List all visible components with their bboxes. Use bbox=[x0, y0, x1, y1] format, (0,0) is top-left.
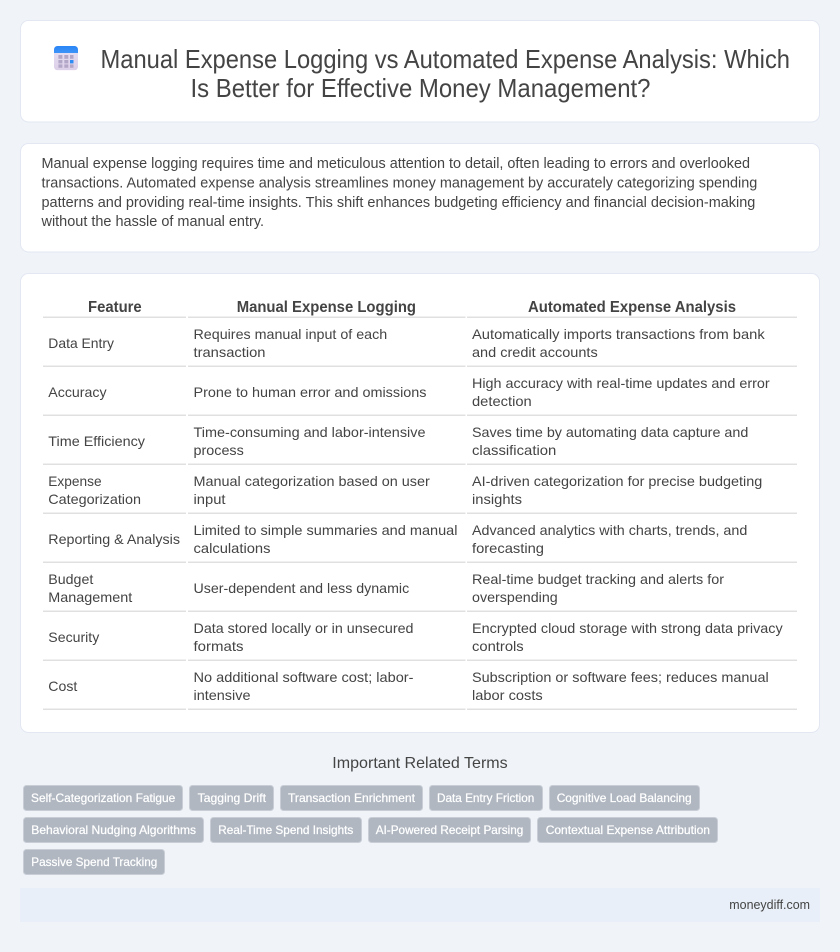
table row: time efficiency: process bbox=[194, 442, 244, 458]
tag: behavioral nudging algorithms: Behavioral Nudging Algorithms bbox=[31, 823, 196, 837]
icon: calendar bbox=[54, 46, 78, 70]
table row: expense categorization: input bbox=[194, 491, 226, 507]
table row: data entry: Data Entry bbox=[48, 335, 114, 351]
tag: tagging drift bbox=[190, 786, 274, 810]
table row: security: controls bbox=[472, 638, 524, 654]
table header row: Automated Expense Analysis bbox=[528, 299, 736, 316]
table row: reporting and analysis: Limited to simple summaries and manual bbox=[194, 522, 458, 538]
panel: title header bbox=[20, 20, 820, 122]
table row: data entry: and credit accounts bbox=[472, 344, 598, 360]
table row: accuracy: High accuracy with real-time updates and error bbox=[472, 375, 770, 391]
table row: cost: No additional software cost; labor- bbox=[194, 669, 414, 685]
table row: cost: intensive bbox=[194, 687, 251, 703]
tag: real-time spend insights: Real-Time Spend Insights bbox=[218, 823, 353, 837]
footer bar bbox=[20, 888, 820, 922]
tag: data entry friction: Data Entry Friction bbox=[437, 791, 534, 805]
table row: expense categorization: Manual categorization based on user bbox=[194, 473, 430, 489]
table row: budget management: Management bbox=[48, 589, 132, 605]
table row: security: Data stored locally or in unsecured bbox=[194, 620, 414, 636]
tag: behavioral nudging algorithms bbox=[24, 818, 204, 842]
tag: self-categorization fatigue bbox=[24, 786, 182, 810]
table row: reporting and analysis: calculations bbox=[194, 540, 270, 556]
table row: security: Encrypted cloud storage with strong data privacy bbox=[472, 620, 783, 636]
table header row: Manual Expense Logging bbox=[237, 299, 416, 316]
tag: tagging drift: Tagging Drift bbox=[198, 791, 267, 805]
table row: budget management: User-dependent and less dynamic bbox=[194, 580, 409, 596]
table row: cost: Cost bbox=[48, 678, 77, 694]
table row: expense categorization: insights bbox=[472, 491, 522, 507]
table row: time efficiency: classification bbox=[472, 442, 556, 458]
title bbox=[100, 46, 790, 103]
table row: cost: labor costs bbox=[472, 687, 543, 703]
table row: expense categorization bbox=[43, 473, 797, 514]
tag: contextual expense attribution bbox=[538, 818, 718, 842]
table row: expense categorization: Expense bbox=[48, 473, 102, 489]
tag: cognitive load balancing: Cognitive Load Balancing bbox=[557, 791, 692, 805]
text block: introduction: transactions. Automated expense analysis streamlines money management by accurately categorizing spending bbox=[42, 176, 757, 192]
tag: cognitive load balancing bbox=[550, 786, 700, 810]
tag: self-categorization fatigue: Self-Categorization Fatigue bbox=[31, 791, 176, 805]
tag: ai-powered receipt parsing bbox=[368, 818, 530, 842]
panel: comparison table bbox=[20, 274, 820, 732]
table row: time efficiency: Time Efficiency bbox=[48, 433, 145, 449]
tag: data entry friction bbox=[430, 786, 542, 810]
table row: data entry: Automatically imports transactions from bank bbox=[472, 326, 766, 342]
table header row: Feature bbox=[88, 299, 142, 316]
panel: introduction text bbox=[20, 144, 820, 252]
table row: security bbox=[43, 620, 797, 661]
footer source text: moneydiff.com bbox=[729, 898, 810, 912]
table row: budget management: overspending bbox=[472, 589, 558, 605]
tag: transaction enrichment: Transaction Enrichment bbox=[288, 791, 416, 805]
table row: time efficiency: Time-consuming and labor-intensive bbox=[194, 424, 426, 440]
tag: passive spend tracking: Passive Spend Tracking bbox=[31, 855, 157, 869]
table row: data entry: Requires manual input of each bbox=[194, 326, 387, 342]
table row: budget management: Real-time budget tracking and alerts for bbox=[472, 571, 724, 587]
panel: related term tags bbox=[24, 786, 718, 874]
table row: accuracy: detection bbox=[472, 393, 532, 409]
table row: cost: Subscription or software fees; reduces manual bbox=[472, 669, 769, 685]
text block: introduction: patterns and providing real-time insights. This shift enhances budgeting efficiency and financial decision-making bbox=[42, 195, 755, 211]
table row: reporting and analysis: Advanced analytics with charts, trends, and bbox=[472, 522, 747, 538]
table row: expense categorization: AI-driven categorization for precise budgeting bbox=[472, 473, 762, 489]
table row: accuracy: Prone to human error and omissions bbox=[194, 384, 426, 400]
tag: real-time spend insights bbox=[210, 818, 362, 842]
table row: reporting and analysis bbox=[43, 522, 797, 563]
text block: introduction bbox=[40, 156, 757, 230]
table row: time efficiency bbox=[43, 424, 797, 465]
table row: accuracy bbox=[43, 375, 797, 416]
title: Manual Expense Logging vs Automated Expense Analysis: Which bbox=[100, 46, 790, 74]
table header row bbox=[43, 299, 797, 318]
tag: transaction enrichment bbox=[280, 786, 422, 810]
table row: budget management: Budget bbox=[48, 571, 93, 587]
tag: contextual expense attribution: Contextual Expense Attribution bbox=[546, 823, 710, 837]
table row: reporting and analysis: forecasting bbox=[472, 540, 544, 556]
heading: important related terms: Important Related Terms bbox=[332, 755, 508, 772]
table row: security: Security bbox=[48, 629, 99, 645]
table row: cost bbox=[43, 669, 797, 710]
tag: passive spend tracking bbox=[24, 850, 164, 874]
text block: introduction: without the hassle of manual entry. bbox=[40, 214, 264, 230]
table row: reporting and analysis: Reporting & Analysis bbox=[48, 531, 180, 547]
table row: time efficiency: Saves time by automating data capture and bbox=[472, 424, 748, 440]
table row: budget management bbox=[43, 571, 797, 612]
table row: data entry bbox=[43, 326, 797, 367]
table row: accuracy: Accuracy bbox=[48, 384, 107, 400]
title: Is Better for Effective Money Management? bbox=[190, 75, 650, 103]
table row: security: formats bbox=[194, 638, 244, 654]
table row: data entry: transaction bbox=[194, 344, 266, 360]
text block: introduction: Manual expense logging requires time and meticulous attention to detail, often leading to errors and overlooked bbox=[42, 156, 750, 172]
table row: expense categorization: Categorization bbox=[48, 491, 141, 507]
tag: ai-powered receipt parsing: AI-Powered Receipt Parsing bbox=[376, 823, 523, 837]
